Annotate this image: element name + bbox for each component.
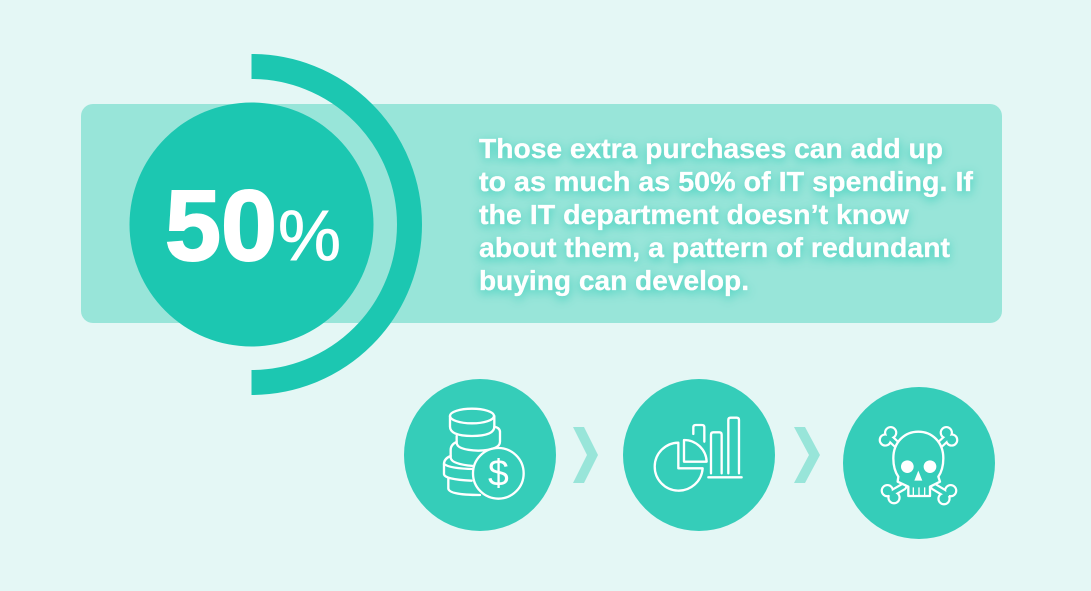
stat number: 50%: % xyxy=(278,197,341,276)
icon: pie and bar chart xyxy=(623,379,775,531)
icon: coins with dollar: $ xyxy=(488,452,509,494)
text block: explanation: about them, a pattern of redundant xyxy=(479,232,950,263)
panel: background band xyxy=(81,104,1002,323)
icon: skull and crossbones xyxy=(843,387,995,539)
text block: explanation xyxy=(479,133,974,296)
text block: explanation: Those extra purchases can add up xyxy=(479,133,943,164)
arrow: chevron 2 xyxy=(794,427,820,483)
text block: explanation: to as much as 50% of IT spending. If xyxy=(479,166,974,197)
text block: explanation: the IT department doesn’t know xyxy=(479,199,910,230)
progress arc xyxy=(252,66,410,382)
text block: explanation: buying can develop. xyxy=(479,265,749,296)
stat circle xyxy=(130,102,374,346)
icon: coins with dollar xyxy=(404,379,556,531)
stat number: 50%: 50 xyxy=(165,170,277,282)
arrow: chevron 1 xyxy=(573,427,598,483)
